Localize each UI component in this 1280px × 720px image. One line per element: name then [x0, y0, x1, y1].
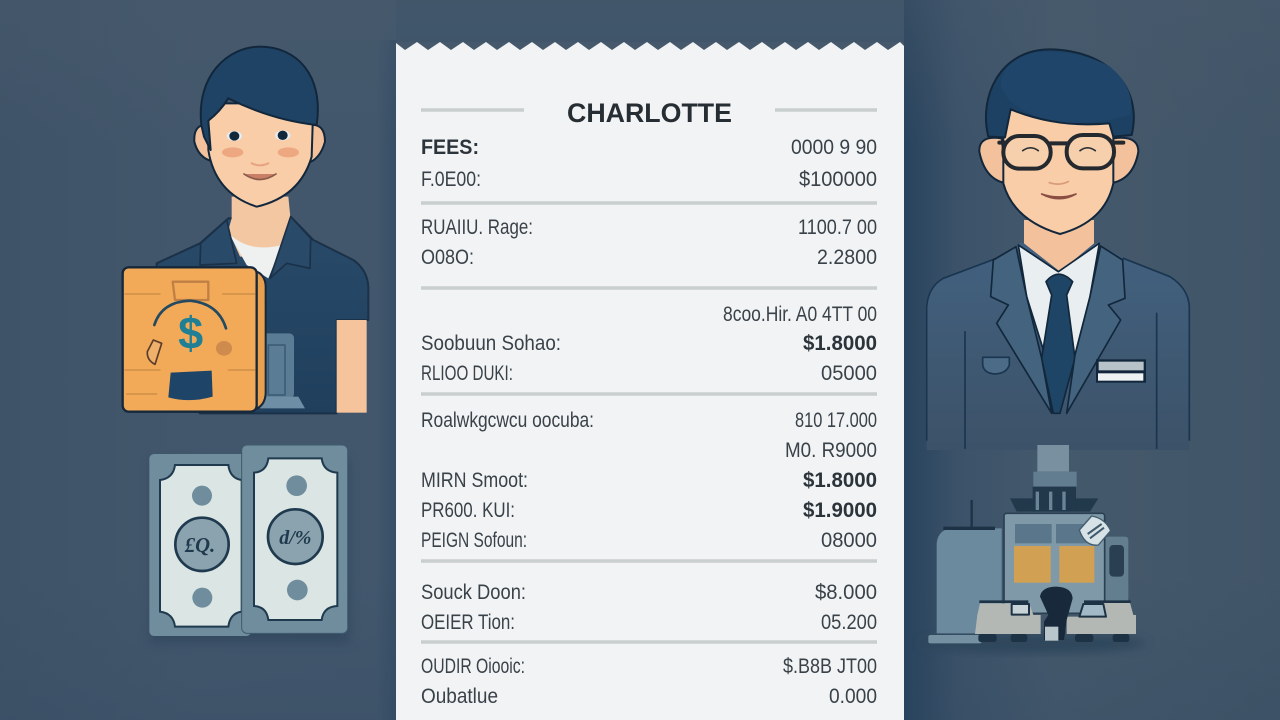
receipt rows: right values: 810 17.000 [795, 409, 877, 432]
receipt rows: right values: 2.2800 [817, 246, 877, 269]
banknote shadow [150, 460, 350, 643]
receipt rows: right values: M0. R9000 [785, 439, 877, 462]
left vehicle [975, 602, 1041, 642]
receipt rows: right values: $.B8B JT00 [783, 655, 877, 678]
cashier face [208, 103, 313, 207]
necktie [1042, 274, 1075, 413]
receipt rows: left labels: Souck Doon: [421, 581, 526, 604]
left banknote: £Q. [184, 535, 215, 557]
face [1003, 110, 1113, 234]
receipt title: CHARLOTTE [567, 98, 732, 128]
cashier neck and undershirt [228, 197, 291, 257]
receipt rows: right values: 0000 9 90 [791, 136, 877, 159]
shirt collar and front [1018, 243, 1099, 355]
closed eyes, nose and smile [1023, 148, 1095, 199]
top chimney [1010, 445, 1098, 512]
receipt rows: right values: $1.8000 [803, 332, 877, 355]
jacket outline and seams [927, 258, 1189, 448]
illustration: man in suit with glasses [927, 49, 1189, 450]
receipt rows: left labels: O08O: [421, 246, 474, 269]
receipt rows: left labels: Roalwkgcwcu oocuba: [421, 409, 594, 432]
main machine body [1004, 513, 1105, 613]
receipt [396, 42, 904, 720]
jacket pocket [983, 357, 1009, 374]
ears [979, 138, 1138, 183]
receipt rows: left labels: FEES: [421, 136, 479, 159]
neck [1024, 220, 1094, 272]
receipt rows: right values: $100000 [799, 168, 877, 191]
right vehicle [1067, 602, 1136, 642]
cash register behind box [260, 333, 305, 408]
right banknote: d/% [279, 527, 311, 549]
glasses [999, 135, 1123, 169]
receipt rows: left labels: PR600. KUI: [421, 499, 515, 522]
cashier hair [201, 47, 318, 150]
illustration: ATM and vehicles machine [920, 445, 1147, 653]
illustration: cashier with orange money box [123, 47, 368, 413]
receipt rows: right values: $1.8000 [803, 469, 877, 492]
receipt paper with zigzag top edge [396, 42, 904, 720]
receipt rows: left labels: OEIER Tion: [421, 611, 515, 634]
illustration: two banknotes [149, 445, 350, 643]
lapels [991, 246, 1125, 413]
right side panel [1105, 537, 1128, 602]
receipt rows: left labels: RLIOO DUKI: [421, 362, 513, 385]
receipt rows: right values: 1100.7 00 [798, 216, 877, 239]
hair highlight [1001, 52, 1131, 123]
receipt rows: right values: 0.000 [829, 685, 877, 708]
receipt rows: right values: $1.9000 [803, 499, 877, 522]
side cabinet [928, 500, 1002, 643]
receipt rows: left labels: RUAIIU. Rage: [421, 216, 533, 239]
cashier ears [194, 125, 325, 163]
receipt rows: left labels: Soobuun Sohao: [421, 332, 561, 355]
receipt rows: left labels: F.0E00: [421, 168, 481, 191]
receipt rows: right values: 05000 [821, 362, 877, 385]
receipt dividers [421, 110, 877, 642]
machine shadow [920, 633, 1147, 653]
card icon [1079, 516, 1111, 545]
name badge [1096, 359, 1146, 383]
receipt rows: left labels: PEIGN Sofoun: [421, 529, 527, 552]
left banknote [149, 454, 251, 636]
receipt rows: left labels: Oubatlue [421, 685, 498, 708]
receipt rows: right values: $8.000 [815, 581, 877, 604]
cashier collar [200, 217, 311, 278]
central figure [1040, 587, 1073, 641]
cashier torso [157, 216, 368, 413]
orange money box [123, 267, 266, 412]
suit jacket [927, 243, 1189, 450]
receipt rows: right values [723, 136, 877, 708]
receipt rows: left labels: OUDIR Oiooic: [421, 655, 525, 678]
receipt rows: left labels [421, 136, 594, 708]
receipt rows: right values: 08000 [821, 529, 877, 552]
cashier arm [337, 320, 367, 413]
orange money box: $ [178, 307, 203, 358]
right banknote [242, 445, 348, 633]
receipt rows: right values: 05.200 [821, 611, 877, 634]
receipt rows: left labels: MIRN Smoot: [421, 469, 528, 492]
hair [986, 49, 1134, 137]
cashier eyes, cheeks, nose and smile [222, 130, 299, 179]
receipt rows: right values: 8coo.Hir. A0 4TT 00 [723, 303, 877, 326]
